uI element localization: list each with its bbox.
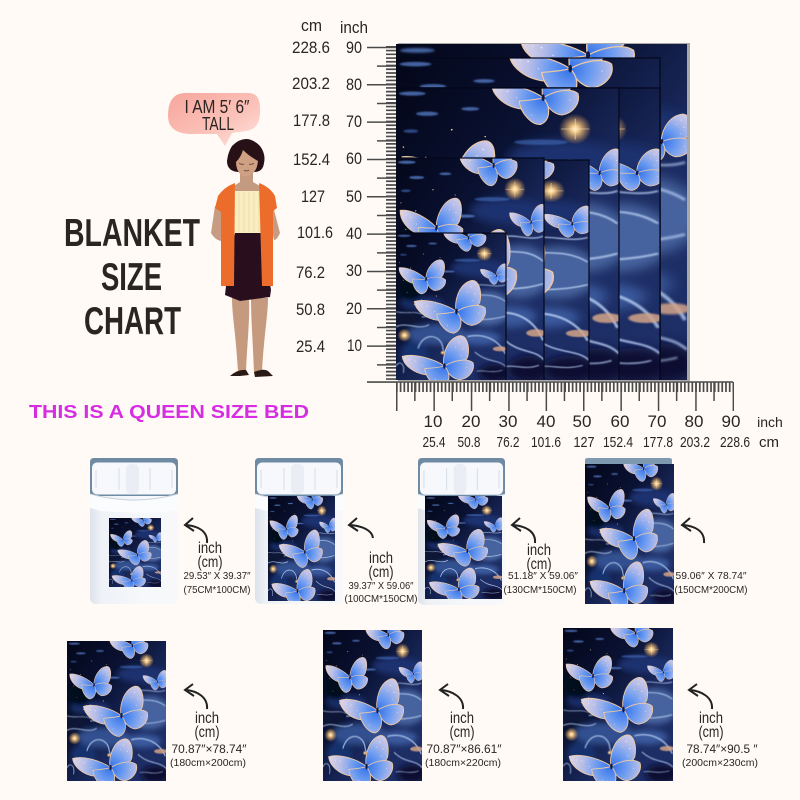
title: [64, 212, 200, 343]
size label 3: (cm): [526, 556, 552, 573]
size label 5: (cm): [194, 724, 220, 741]
horizontal cm labels: 177.8: [643, 434, 673, 451]
size label 7: [682, 710, 758, 769]
size label 6: inch: [450, 710, 474, 727]
blanket 200x230: [559, 613, 678, 789]
horizontal cm labels: 152.4: [603, 434, 633, 451]
size label 1: [184, 540, 251, 596]
queen size heading: THIS IS A QUEEN SIZE BED: [29, 402, 309, 422]
size label 4: (150CM*200CM): [674, 584, 748, 596]
cm and inch axis labels (vertical): [292, 16, 368, 356]
size label 2: 39.37″ X 59.06″: [348, 580, 414, 592]
size label 5: inch: [195, 710, 219, 727]
size label 2: (100CM*150CM): [344, 593, 418, 605]
cm and inch axis labels (vertical): 10: [347, 336, 362, 355]
size label 7: (200cm×230cm): [682, 758, 758, 769]
cm and inch axis labels (vertical): 177.8: [293, 111, 330, 130]
size label 2: inch: [369, 550, 393, 567]
size label 1: inch: [198, 540, 222, 557]
title: BLANKET: [64, 212, 200, 255]
size label 6: (cm): [450, 724, 474, 741]
speech bubble: [168, 93, 260, 146]
horizontal cm labels: 228.6: [720, 434, 750, 451]
cm and inch axis labels (vertical): 80: [346, 75, 362, 94]
title: CHART: [84, 300, 181, 343]
horizontal inch labels: 10: [424, 412, 442, 431]
cm and inch axis labels (vertical): 40: [346, 224, 362, 243]
size label 7: 78.74″×90.5 ″: [686, 744, 758, 756]
cm and inch axis labels (vertical): 50.8: [296, 300, 325, 319]
cm and inch axis labels (vertical): 90: [346, 38, 362, 57]
speech bubble: I AM 5′ 6″: [184, 97, 250, 117]
cm and inch axis labels (vertical): 60: [346, 149, 362, 168]
horizontal inch labels: 40: [537, 412, 555, 431]
arrow 5: [185, 684, 207, 709]
size label 7: inch: [699, 710, 723, 727]
size label 3: (130CM*150CM): [504, 584, 576, 596]
horizontal inch labels: 50: [573, 412, 591, 431]
bed 4: 150x200: [582, 450, 678, 611]
horizontal inch labels: 90: [722, 412, 740, 431]
horizontal cm labels: 127: [574, 434, 594, 451]
horizontal inch labels: 60: [611, 412, 629, 431]
size label 1: (75CM*100CM): [184, 584, 250, 596]
cm and inch axis labels (vertical): inch: [340, 18, 368, 37]
bed 3: 130x150: [418, 458, 506, 605]
arrow 2: [349, 518, 373, 538]
horizontal cm labels: 203.2: [680, 434, 710, 451]
cm and inch axis labels (vertical): 127: [301, 187, 325, 206]
bed 2: 100x150: [255, 458, 343, 606]
blanket 180x200: [64, 627, 171, 788]
horizontal cm labels: cm: [759, 434, 779, 451]
blanket 180x220: [320, 615, 427, 789]
size label 4: [674, 570, 748, 596]
vertical ruler: [367, 46, 396, 383]
arrow 7: [689, 684, 712, 709]
size label 1: 29.53″ X 39.37″: [184, 570, 251, 582]
horizontal cm labels: 50.8: [458, 434, 480, 451]
horizontal inch labels: 80: [685, 412, 703, 431]
person figure: [211, 139, 280, 377]
size label 6: [425, 710, 502, 769]
horizontal ruler: [396, 382, 734, 396]
cm and inch axis labels (vertical): 70: [346, 112, 362, 131]
cm and inch axis labels (vertical): 50: [346, 187, 362, 206]
horizontal cm labels: 101.6: [531, 434, 561, 451]
cm and inch axis labels (vertical): cm: [301, 16, 322, 35]
size label 5: (180cm×200cm): [170, 758, 246, 769]
cm and inch axis labels (vertical): 228.6: [292, 38, 330, 57]
size label 1: (cm): [198, 554, 222, 571]
cm and inch axis labels (vertical): 20: [346, 299, 362, 318]
cm and inch axis labels (vertical): 203.2: [292, 74, 330, 93]
arrow 4: [682, 518, 704, 543]
horizontal cm labels: [422, 434, 779, 451]
size label 3: 51.18″ X 59.06″: [508, 570, 578, 582]
size label 5: [170, 710, 246, 769]
cm and inch axis labels (vertical): 152.4: [293, 150, 330, 169]
size label 4: 59.06″ X 78.74″: [676, 570, 747, 582]
cm and inch axis labels (vertical): 76.2: [296, 263, 325, 282]
size label 6: (180cm×220cm): [425, 758, 501, 769]
size label 2: (cm): [368, 564, 394, 581]
size label 6: 70.87″×86.61″: [426, 744, 502, 756]
horizontal inch labels: inch: [757, 414, 783, 430]
arrow 3: [512, 518, 535, 543]
size label 3: [504, 542, 578, 596]
size label 7: (cm): [698, 724, 724, 741]
arrow 6: [440, 684, 463, 709]
horizontal inch labels: [424, 412, 783, 431]
horizontal inch labels: 70: [648, 412, 666, 431]
stacked blanket size comparison: [386, 11, 702, 397]
cm and inch axis labels (vertical): 30: [346, 261, 362, 280]
horizontal cm labels: 25.4: [422, 434, 446, 451]
cm and inch axis labels (vertical): 101.6: [297, 223, 333, 242]
cm and inch axis labels (vertical): 25.4: [296, 337, 325, 356]
arrow 1: [185, 518, 207, 543]
speech bubble: TALL: [202, 114, 234, 134]
horizontal inch labels: 30: [499, 412, 517, 431]
size label 3: inch: [527, 542, 551, 559]
bed 1: 75x100: [90, 458, 178, 604]
size label 5: 70.87″×78.74″: [172, 744, 246, 756]
horizontal cm labels: 76.2: [496, 434, 520, 451]
horizontal inch labels: 20: [462, 412, 480, 431]
size label 2: [344, 550, 418, 605]
title: SIZE: [101, 256, 162, 299]
